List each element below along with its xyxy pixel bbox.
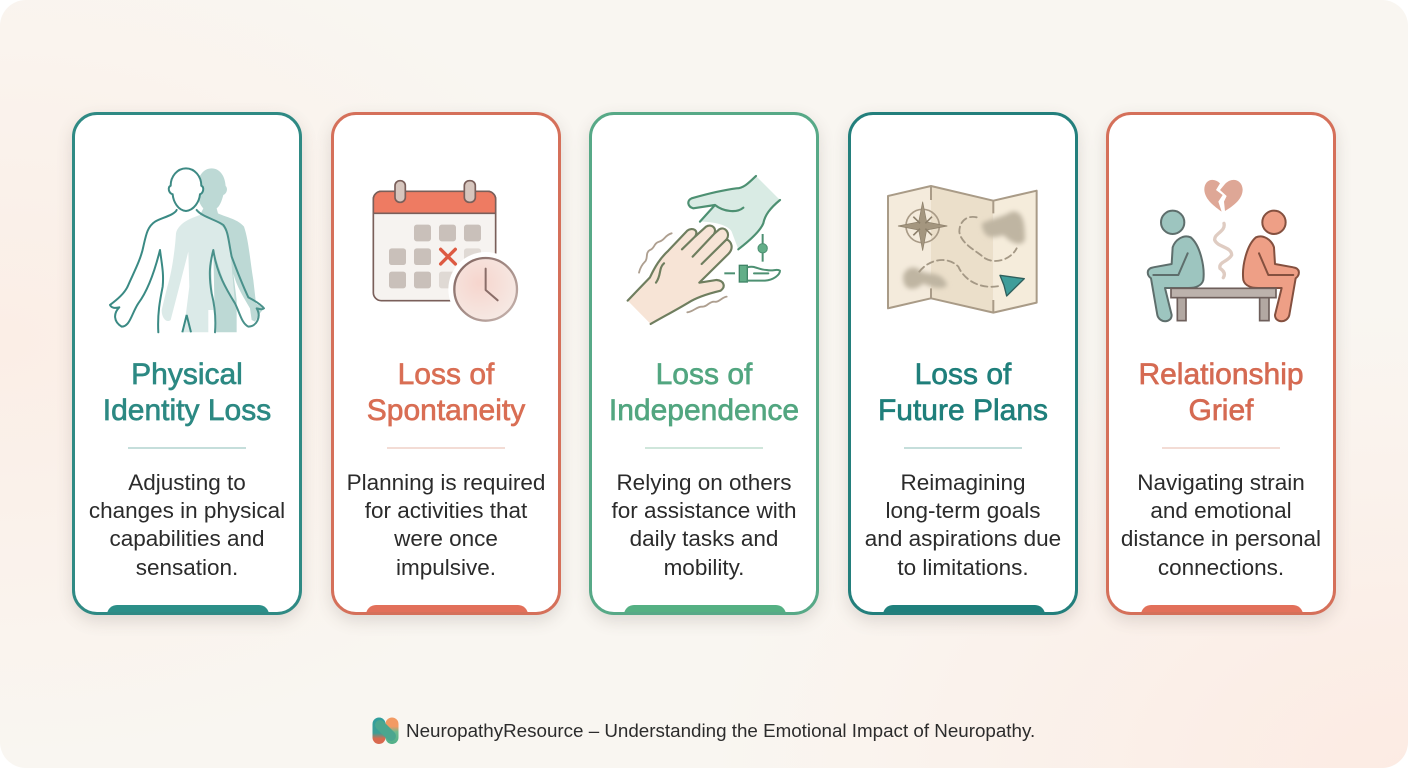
description <box>611 470 797 580</box>
heading: Spontaneity <box>367 394 525 427</box>
description: were once <box>394 526 498 551</box>
description: to limitations. <box>897 555 1029 580</box>
heading: Physical <box>131 358 243 391</box>
heading <box>103 358 271 427</box>
heading <box>878 358 1048 427</box>
description <box>1121 470 1321 580</box>
description: Navigating strain <box>1137 470 1305 495</box>
description: and aspirations due <box>865 526 1061 551</box>
description: and emotional <box>1150 498 1292 523</box>
description <box>89 470 285 580</box>
description: changes in physical <box>89 498 285 523</box>
description <box>347 470 545 580</box>
panel: loss of future plans <box>848 112 1078 615</box>
description: connections. <box>1158 555 1284 580</box>
description: Planning is required <box>347 470 545 495</box>
heading: Grief <box>1188 394 1254 427</box>
description: sensation. <box>136 555 238 580</box>
icon: two people on bench with broken heart <box>1146 180 1300 322</box>
icon: calendar and clock <box>372 180 518 322</box>
description: Adjusting to <box>128 470 246 495</box>
panel: relationship grief <box>1106 112 1336 615</box>
panel: loss of independence <box>589 112 819 615</box>
footer text: NeuropathyResource – Understanding the Emotional Impact of Neuropathy. <box>406 720 1035 741</box>
description: for assistance with <box>611 498 797 523</box>
heading: Loss of <box>915 358 1011 391</box>
description: daily tasks and <box>630 526 778 551</box>
description: long-term goals <box>885 498 1041 523</box>
description: for activities that <box>365 498 527 523</box>
heading: Future Plans <box>878 394 1048 427</box>
description: mobility. <box>664 555 744 580</box>
description <box>865 470 1061 580</box>
heading <box>1138 358 1304 427</box>
heading: Loss of <box>656 358 752 391</box>
heading: Loss of <box>398 358 494 391</box>
icon: faded map <box>887 185 1038 314</box>
description: Reimagining <box>900 470 1026 495</box>
footer <box>372 718 1035 744</box>
description: impulsive. <box>396 555 496 580</box>
icon: logo <box>372 718 398 744</box>
heading <box>367 358 526 427</box>
heading <box>609 358 799 427</box>
icon: body with shadow figure <box>109 167 265 334</box>
heading: Independence <box>609 394 799 427</box>
panel: loss of spontaneity <box>331 112 561 615</box>
description: distance in personal <box>1121 526 1321 551</box>
icon: helping hands <box>626 174 782 326</box>
heading: Relationship <box>1138 358 1304 391</box>
heading: Identity Loss <box>103 394 271 427</box>
description: capabilities and <box>109 526 265 551</box>
description: Relying on others <box>616 470 792 495</box>
panel: physical identity loss <box>72 112 302 615</box>
